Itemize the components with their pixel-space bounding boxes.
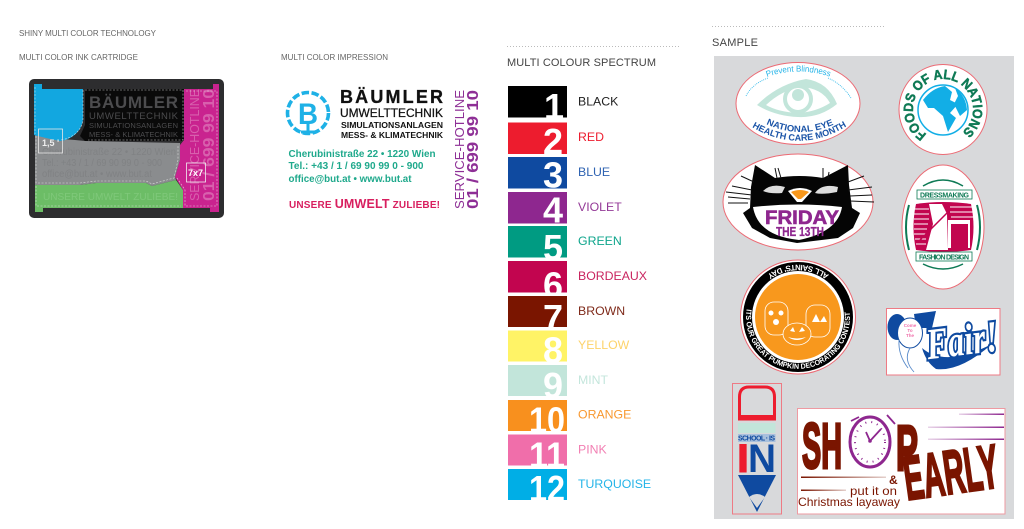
- logo icon: [288, 92, 328, 134]
- sticker: fair: Come: [904, 323, 917, 328]
- swatch 2 red: [508, 122, 604, 154]
- swatch 7 brown: 7: [543, 297, 563, 338]
- vertical service hotline: 01 / 699 99 10: [465, 90, 482, 209]
- swatch 10 orange: 10: [529, 400, 565, 440]
- heading: sample: SAMPLE: [712, 37, 758, 49]
- contact details: [288, 149, 436, 185]
- swatch 11 pink: [508, 434, 606, 466]
- swatch 10 orange: [508, 400, 631, 431]
- sticker: school is in: N: [748, 437, 776, 481]
- cartridge ghost text: UMWELTTECHNIK: [89, 111, 179, 122]
- sticker: fair: To: [907, 328, 913, 333]
- sticker: shop early: P: [896, 412, 918, 484]
- cartridge gray zone: [35, 135, 180, 186]
- cartridge green zone: [35, 180, 183, 212]
- cartridge gray zone ghost text: Tel.: +43 / 1 / 69 90 99 0 - 900: [42, 158, 162, 169]
- company name: SIMULATIONSANLAGEN: [341, 120, 443, 130]
- sticker: shop early: SH: [802, 410, 842, 482]
- sticker: fair: [886, 308, 1001, 375]
- swatch 8 yellow: [508, 330, 630, 362]
- contact details: Tel.: +43 / 1 / 69 90 99 0 - 900: [288, 161, 424, 172]
- swatch 9 mint: [508, 365, 608, 396]
- sticker: fair: Fair!: [923, 312, 1001, 369]
- swatch 10 orange: ORANGE: [578, 408, 631, 422]
- sticker: friday the 13th cat: [723, 154, 874, 250]
- swatch 5 green: 5: [543, 227, 563, 268]
- heading: multi colour spectrum: MULTI COLOUR SPECTRUM: [507, 57, 656, 69]
- sticker: school is in: SCHOOL · IS: [738, 436, 775, 442]
- swatch 8 yellow: YELLOW: [578, 338, 630, 352]
- sticker: dressmaking fashion design: DRESSMAKING: [920, 192, 970, 200]
- company name: UMWELTTECHNIK: [340, 106, 443, 120]
- swatch 4 violet: VIOLET: [578, 200, 622, 214]
- heading: shiny multi color technology: SHINY MULTI COLOR TECHNOLOGY: [19, 29, 157, 38]
- cartridge black zone: [80, 89, 184, 141]
- speed lines: [959, 414, 1004, 415]
- swatch 3 blue: BLUE: [578, 165, 610, 179]
- swatch 9 mint: MINT: [578, 373, 609, 387]
- vertical service hotline: [452, 90, 482, 209]
- swatch 3 blue: [508, 157, 610, 188]
- sticker: school is in: I: [737, 437, 749, 481]
- slogan: UNSERE UMWELT ZULIEBE!: [289, 197, 440, 211]
- contact details: office@but.at • www.but.at: [288, 174, 412, 185]
- swatch 6 bordeaux: BORDEAUX: [578, 269, 647, 283]
- cartridge gray zone ghost text: Cherubinistraße 22 • 1220 Wien: [42, 147, 176, 158]
- sticker: all saints day pumpkin: ALL SAINTS' DAY: [768, 264, 829, 280]
- cartridge top bar: [42, 80, 213, 88]
- swatch 3 blue: 3: [543, 154, 563, 196]
- company name: [340, 87, 444, 140]
- cartridge magenta zone ghost text: SERVICE-HOTLINE: [187, 89, 202, 201]
- cartridge ghost text: MESS- & KLIMATECHNIK: [89, 130, 178, 139]
- size box 7x7: 7x7: [188, 168, 203, 178]
- color spectrum list: [508, 86, 651, 509]
- swatch 11 pink: 11: [529, 434, 565, 476]
- swatch 6 bordeaux: 6: [543, 264, 563, 306]
- sample background: [714, 56, 1014, 519]
- sticker: shop early: put it on: [850, 484, 897, 498]
- shop early tagline: &: [889, 473, 898, 487]
- swatch 7 brown: BROWN: [578, 304, 625, 318]
- size box 7x7: [186, 163, 206, 182]
- swatch 2 red: 2: [543, 121, 563, 162]
- swatch 12 turquoise: [508, 469, 651, 500]
- sticker: dressmaking fashion design: FASHION DESIGN: [919, 254, 969, 262]
- swatch 4 violet: 4: [543, 190, 563, 230]
- cartridge blue zone: [34, 84, 83, 141]
- sticker: friday the 13th cat: THE 13TH: [776, 224, 824, 239]
- sticker: national eye health care month: NATIONAL EYE: [766, 118, 834, 132]
- company name: BÄUMLER: [340, 87, 443, 107]
- sticker: school is in: [732, 384, 782, 514]
- vertical service hotline: SERVICE-HOTLINE: [452, 90, 467, 209]
- swatch 4 violet: [508, 192, 622, 224]
- size box 1,5: [38, 129, 62, 153]
- cartridge green zone ghost text: UNSERE UMWELT ZULIEBE!: [43, 192, 178, 203]
- swatch 12 turquoise: TURQUOISE: [578, 477, 651, 491]
- cartridge gray zone ghost text: [42, 147, 176, 180]
- sticker: all saints day pumpkin: ITS OUR GREAT PUMPKIN DECORATING CONTEST: [746, 310, 850, 369]
- sticker: all saints day pumpkin: [740, 260, 856, 374]
- cartridge ghost text: SIMULATIONSANLAGEN: [89, 121, 178, 130]
- swatch 12 turquoise: 12: [529, 468, 565, 509]
- swatch 7 brown: [508, 296, 624, 327]
- sticker: national eye health care month: Prevent Blindness: [766, 65, 830, 77]
- cartridge ghost text: BÄUMLER: [89, 93, 178, 112]
- cartridge gray zone ghost text: office@but.at • www.but.at: [42, 169, 152, 180]
- company name: MESS- & KLIMATECHNIK: [341, 130, 444, 140]
- panel: sample stickers: [714, 56, 1014, 519]
- panel: multi color impression business card: [288, 87, 482, 211]
- swatch 8 yellow: 8: [543, 330, 563, 370]
- sticker: friday the 13th cat: FRIDAY: [765, 208, 839, 229]
- swatch 6 bordeaux: [508, 261, 647, 292]
- size box 1,5: 1,5 ': [42, 138, 59, 148]
- heading: multi color impression: MULTI COLOR IMPRESSION: [281, 53, 388, 62]
- contact details: Cherubinistraße 22 • 1220 Wien: [288, 149, 436, 160]
- cartridge magenta zone ghost text: 01 / 699 99 10: [201, 89, 218, 201]
- cartridge magenta zone: [175, 84, 219, 212]
- sticker: fair: The: [906, 333, 914, 338]
- sticker: shop early: Christmas layaway: [798, 495, 900, 509]
- swatch 1 black: [508, 86, 618, 118]
- sticker: national eye health care month: [736, 62, 860, 145]
- sticker: foods of all nations: FOODS OF ALL NATIONS: [903, 69, 983, 142]
- sticker: national eye health care month: HEALTH CARE MONTH: [752, 121, 846, 141]
- clock icon: [850, 415, 895, 467]
- swatch 11 pink: PINK: [578, 442, 607, 456]
- cartridge magenta zone ghost text: [187, 89, 218, 201]
- sticker: dressmaking fashion design: [902, 165, 984, 289]
- cartridge bottom bar: [43, 208, 210, 217]
- swatch 1 black: BLACK: [578, 94, 619, 108]
- swatch 5 green: GREEN: [578, 234, 622, 248]
- heading: multi color ink cartridge: MULTI COLOR INK CARTRIDGE: [19, 53, 138, 62]
- swatch 2 red: RED: [578, 130, 604, 144]
- logo icon: B: [298, 98, 318, 131]
- swatch 1 black: 1: [544, 86, 564, 127]
- swatch 9 mint: 9: [543, 365, 563, 406]
- cartridge ghost text: [89, 93, 179, 139]
- sticker: shop early: [798, 408, 1005, 514]
- cartridge dashed outlines: [35, 87, 217, 206]
- cartridge body: [29, 79, 224, 218]
- swatch 5 green: [508, 226, 621, 258]
- panel: ink cartridge: [29, 79, 224, 218]
